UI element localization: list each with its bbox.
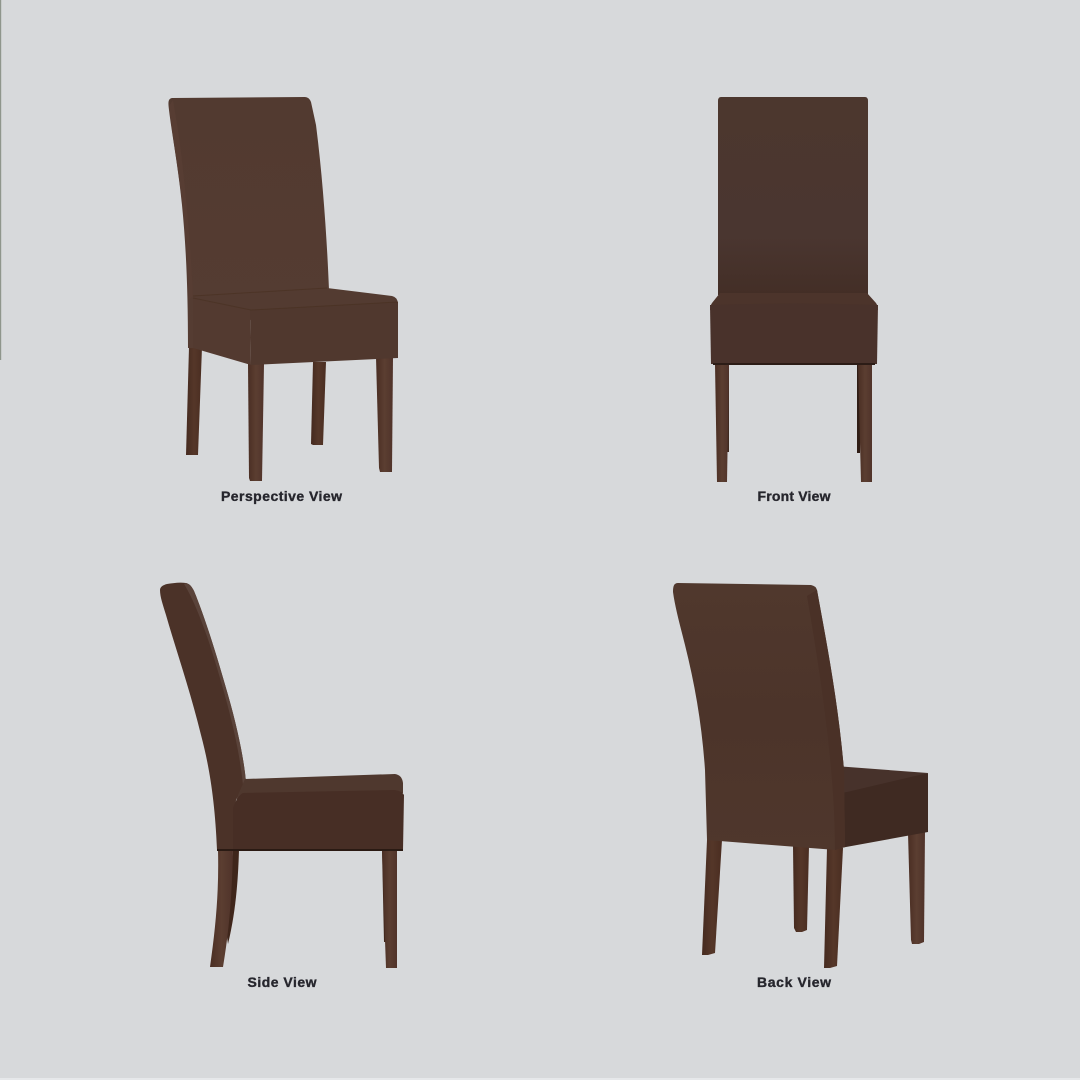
front legs [715, 364, 872, 482]
legs [702, 831, 925, 968]
seat side face [233, 790, 404, 850]
front legs [248, 357, 393, 481]
label: Front View: Front View [758, 488, 831, 504]
chair: back view [673, 583, 928, 968]
backrest [168, 97, 329, 348]
backrest side panel [184, 583, 246, 785]
label: Perspective View: Perspective View [221, 488, 342, 504]
back legs [725, 364, 861, 453]
chair: side view [160, 583, 404, 968]
seat shadow line [217, 849, 403, 851]
seat front face [710, 304, 878, 364]
seat top [234, 774, 403, 808]
chair: perspective view [168, 97, 398, 481]
chair: front view [710, 97, 878, 482]
seat side face [835, 773, 928, 849]
back legs [186, 347, 326, 455]
label: Back View: Back View [757, 974, 831, 990]
backrest panel [673, 583, 845, 850]
backrest [160, 583, 246, 850]
seat seam and backrest crease [193, 288, 398, 310]
seat front face [250, 302, 398, 365]
seat top [193, 288, 398, 311]
label: Side View: Side View [248, 974, 317, 990]
backrest side edge [169, 100, 193, 300]
seat shadow line [713, 363, 875, 365]
rear legs [210, 850, 239, 967]
backrest side edge [807, 590, 845, 850]
front legs [382, 850, 397, 968]
seat top [710, 293, 878, 310]
seat left face [193, 299, 251, 365]
backrest [718, 97, 868, 295]
seat top [835, 766, 928, 800]
